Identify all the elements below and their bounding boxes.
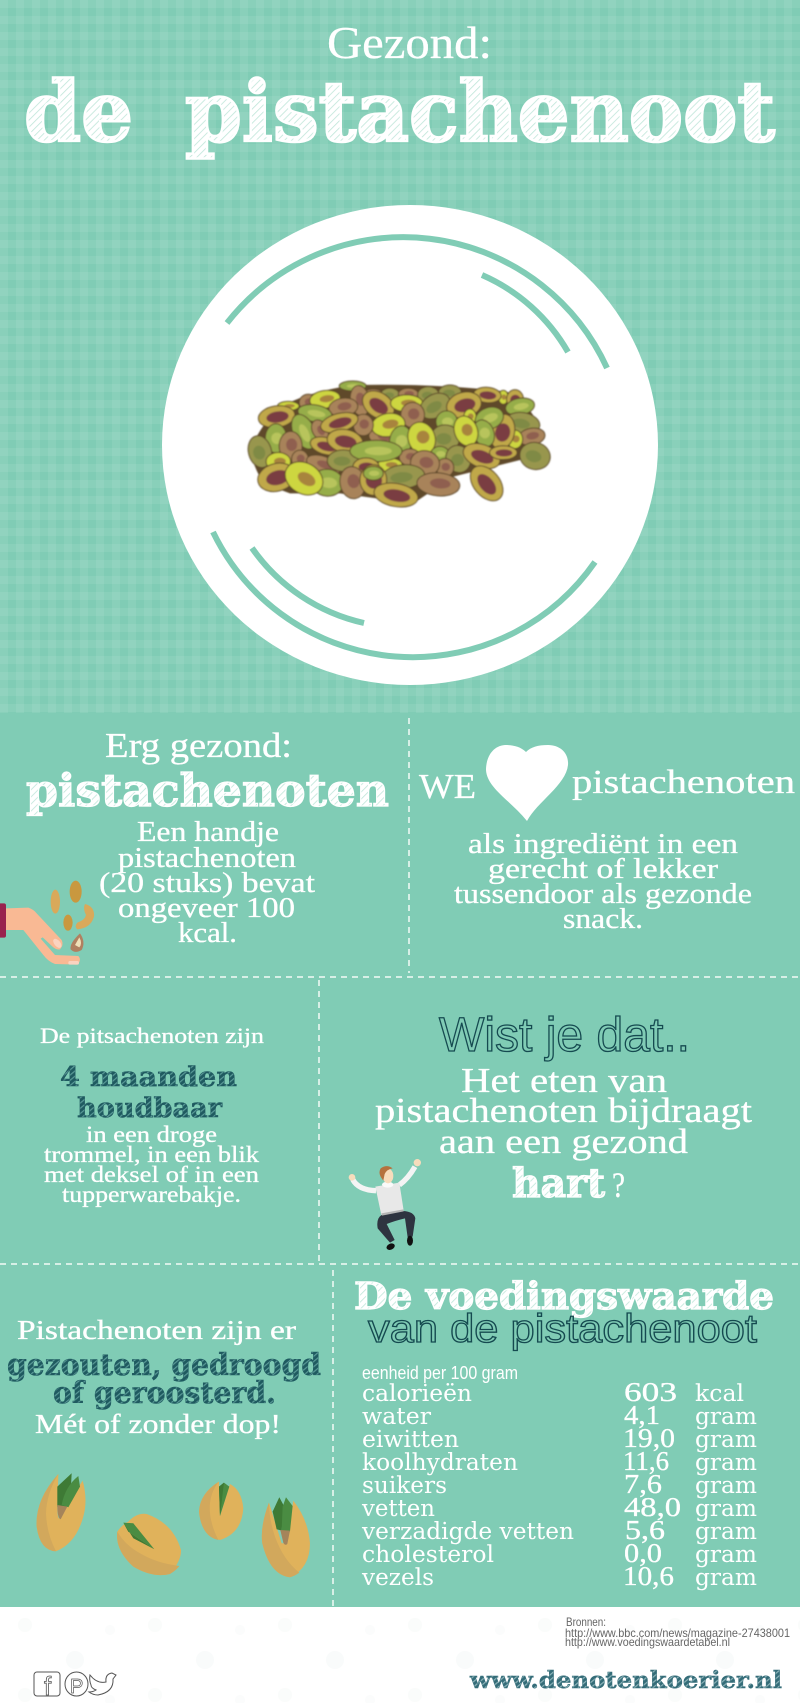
green content panel background bbox=[0, 713, 800, 1607]
heading: van de pistachenoot: van de pistachenoot bbox=[368, 1307, 757, 1351]
sources: Bronnen: bbox=[566, 1615, 606, 1629]
table: values: 48,0 bbox=[624, 1492, 681, 1522]
table: values: 0,0 bbox=[624, 1538, 662, 1568]
plate arcs bbox=[213, 237, 607, 657]
heading: gezouten gedroogd geroosterd: gezouten, gedroogd bbox=[7, 1348, 321, 1383]
text block: kcal: ongeveer 100 bbox=[118, 893, 295, 924]
title word: de: de bbox=[24, 63, 133, 161]
table: nutrient names: vetten bbox=[361, 1496, 435, 1522]
table: values: 11,6 bbox=[623, 1446, 669, 1476]
text block: gezond hart: pistachenoten bijdraagt bbox=[375, 1091, 752, 1130]
table: nutrient names: verzadigde vetten bbox=[361, 1519, 574, 1545]
table: nutrient names: koolhydraten bbox=[362, 1450, 518, 1476]
text block: storage bbox=[44, 1122, 260, 1207]
icon: facebook: f bbox=[44, 1671, 52, 1701]
text block: storage: trommel, in een blik bbox=[44, 1142, 260, 1167]
title line: Gezond: Gezond: bbox=[327, 17, 492, 68]
text block: ingredient: snack. bbox=[563, 904, 643, 935]
text: WE: WE bbox=[419, 767, 476, 806]
table: nutrient names bbox=[361, 1381, 574, 1591]
panel: voedingswaarde bbox=[354, 1274, 774, 1591]
title bbox=[24, 17, 775, 161]
table: units: gram bbox=[695, 1496, 757, 1522]
white plate circle bbox=[162, 205, 658, 685]
table: units: gram bbox=[695, 1404, 757, 1430]
table: units: gram bbox=[695, 1473, 757, 1499]
icon: pinterest: P bbox=[70, 1676, 83, 1698]
table: units: gram bbox=[695, 1427, 757, 1453]
title word: pistachenoot: pistachenoot bbox=[185, 63, 775, 161]
table: values bbox=[623, 1377, 681, 1591]
text block: kcal: (20 stuks) bevat bbox=[99, 868, 315, 899]
website url: www.denotenkoerier.nl bbox=[469, 1667, 782, 1694]
plaid header background bbox=[0, 0, 800, 713]
panel: soorten pistachenoten bbox=[7, 1315, 321, 1577]
heading: 4 maanden houdbaar: houdbaar bbox=[77, 1093, 223, 1124]
text block: kcal bbox=[99, 817, 315, 949]
table: values: 5,6 bbox=[625, 1515, 665, 1545]
text block: gezond hart: hart bbox=[512, 1160, 606, 1207]
text block: gezond hart: aan een gezond bbox=[439, 1122, 689, 1161]
table: values: 4,1 bbox=[624, 1400, 660, 1430]
text block: storage: tupperwarebakje. bbox=[62, 1182, 241, 1207]
section dividers bbox=[0, 718, 800, 1606]
heading: Erg gezond: Erg gezond: bbox=[105, 726, 292, 765]
text block: kcal: pistachenoten bbox=[118, 843, 296, 874]
footer background bbox=[0, 1607, 800, 1703]
text: eenheid: eenheid per 100 gram bbox=[362, 1363, 518, 1383]
sources: http://www.voedingswaardetabel.nl bbox=[565, 1635, 730, 1649]
text: Mét of zonder dop: Mét of zonder dop! bbox=[35, 1409, 281, 1439]
table: nutrient names: cholesterol bbox=[362, 1542, 494, 1568]
icon: twitter bbox=[89, 1673, 116, 1695]
table: units: kcal bbox=[695, 1381, 744, 1407]
table: nutrient names: vezels bbox=[361, 1565, 434, 1591]
panel: we love pistachenoten bbox=[419, 745, 795, 935]
heading: De voedingswaarde: De voedingswaarde bbox=[354, 1274, 774, 1318]
table: units bbox=[695, 1381, 757, 1591]
table: units: gram bbox=[695, 1450, 757, 1476]
table: nutrient names: water bbox=[362, 1404, 431, 1430]
table: units: gram bbox=[695, 1542, 757, 1568]
text block: storage: met deksel of in een bbox=[44, 1162, 260, 1187]
text block: ingredient bbox=[454, 829, 752, 935]
text: pistachenoten: pistachenoten bbox=[572, 764, 795, 801]
heading: Wist je dat: Wist je dat.. bbox=[439, 1009, 690, 1062]
pistachio photo bbox=[245, 381, 553, 510]
table: units: gram bbox=[695, 1565, 757, 1591]
heading: gezouten gedroogd geroosterd: of geroosterd. bbox=[53, 1376, 276, 1411]
text block: kcal: Een handje bbox=[137, 817, 279, 848]
table: nutrient names: calorieën bbox=[362, 1381, 472, 1407]
table: nutrient names: eiwitten bbox=[362, 1427, 459, 1453]
panel: een handje bbox=[0, 726, 389, 965]
table: units: gram bbox=[695, 1519, 757, 1545]
heading: 4 maanden houdbaar bbox=[60, 1062, 237, 1124]
text block: gezond hart bbox=[375, 1061, 752, 1207]
icon: heart bbox=[486, 745, 568, 821]
text: intro: De pitsachenoten zijn bbox=[40, 1023, 264, 1048]
text block: kcal: kcal. bbox=[178, 918, 237, 949]
sources bbox=[565, 1615, 790, 1649]
text: Pistachenoten zijn er: Pistachenoten zijn er bbox=[17, 1315, 296, 1345]
text block: ingredient: tussendoor als gezonde bbox=[454, 879, 752, 910]
heading: gezouten gedroogd geroosterd bbox=[7, 1348, 321, 1411]
text block: storage: in een droge bbox=[86, 1122, 217, 1147]
text block: ingredient: gerecht of lekker bbox=[488, 854, 719, 885]
panel: wist je dat bbox=[349, 1009, 752, 1251]
footer bbox=[34, 1615, 790, 1701]
heading: pistachenoten: pistachenoten bbox=[26, 764, 389, 817]
table: nutrient names: suikers bbox=[362, 1473, 447, 1499]
hero plate with pistachios bbox=[162, 205, 658, 685]
heading: 4 maanden houdbaar: 4 maanden bbox=[60, 1062, 237, 1093]
icon: pistachio shells bbox=[37, 1473, 310, 1577]
icon: jumping man bbox=[349, 1159, 421, 1251]
social icons bbox=[34, 1671, 116, 1701]
icon: hand with nuts bbox=[0, 881, 94, 965]
panel: houdbaarheid bbox=[40, 1023, 264, 1207]
table: values: 19,0 bbox=[623, 1423, 675, 1453]
table: values: 7,6 bbox=[624, 1469, 662, 1499]
table: values: 603 bbox=[624, 1377, 677, 1407]
text block: gezond hart: ? bbox=[612, 1165, 625, 1205]
table: values: 10,6 bbox=[623, 1561, 674, 1591]
text block: gezond hart: Het eten van bbox=[461, 1061, 667, 1100]
text block: ingredient: als ingrediënt in een bbox=[468, 829, 738, 860]
